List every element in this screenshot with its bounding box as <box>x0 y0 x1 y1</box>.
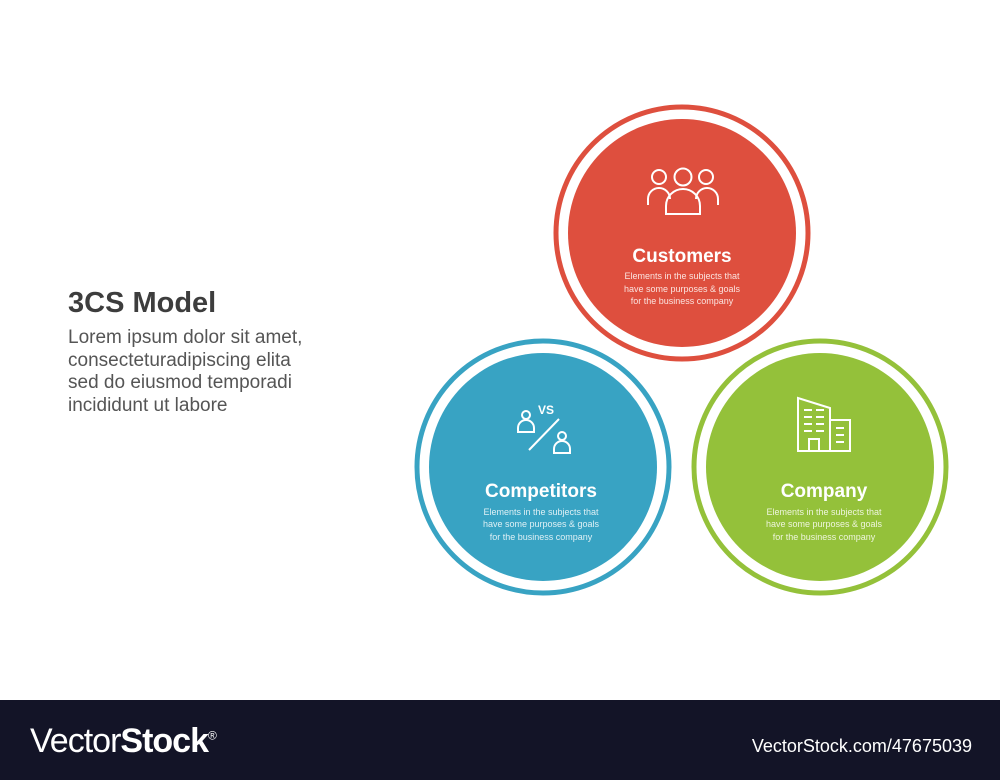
circle: competitors: VS <box>538 403 554 417</box>
circle: competitors: Elements in the subjects that <box>483 507 599 517</box>
circle: company: have some purposes & goals <box>766 519 883 529</box>
description text: incididunt ut labore <box>68 394 228 416</box>
circle: customers: for the business company <box>631 296 734 306</box>
title: 3CS Model <box>68 287 216 319</box>
description text: Lorem ipsum dolor sit amet, <box>68 327 302 348</box>
circle: customers <box>556 107 808 359</box>
icon: people <box>648 168 718 214</box>
description text <box>68 327 302 416</box>
circle: competitors: for the business company <box>490 532 593 542</box>
footer <box>0 700 1000 780</box>
icon: vs people <box>518 411 570 453</box>
circle: competitors: Competitors <box>485 481 597 502</box>
circle: customers: Customers <box>632 246 732 267</box>
description text: consecteturadipiscing elita <box>68 350 291 370</box>
circle: company: Company <box>781 481 868 502</box>
logo: VectorStock® <box>30 722 216 760</box>
url: VectorStock.com/47675039 <box>752 736 972 756</box>
circle: company: Elements in the subjects that <box>766 507 882 517</box>
description text: sed do eiusmod temporadi <box>68 372 292 393</box>
circle: competitors <box>417 341 669 593</box>
icon: building <box>798 398 850 451</box>
circle: company <box>694 341 946 593</box>
circle: customers: Elements in the subjects that <box>624 271 740 281</box>
circle: company: for the business company <box>773 532 876 542</box>
circle: customers: have some purposes & goals <box>624 284 741 294</box>
circle: competitors: have some purposes & goals <box>483 519 600 529</box>
